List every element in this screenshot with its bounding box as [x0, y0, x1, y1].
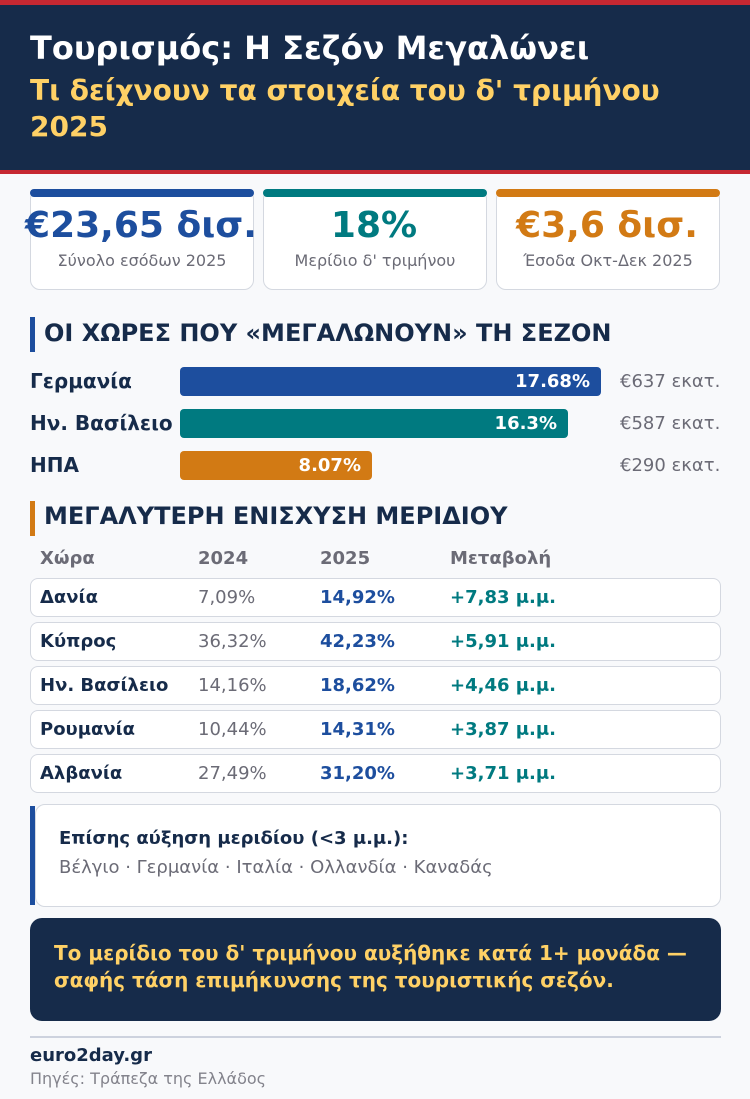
table row: Cyprus: +5,91 μ.μ. [450, 631, 556, 652]
header banner [0, 0, 750, 174]
bar row: Germany: €637 εκατ. [620, 371, 720, 392]
table row: Albania: +3,71 μ.μ. [450, 763, 556, 784]
bar row: USA: ΗΠΑ [30, 453, 79, 477]
table row: Denmark: Δανία [40, 587, 98, 608]
table header [40, 548, 551, 569]
table row: Cyprus: 36,32% [198, 631, 267, 652]
table header: Μεταβολή [450, 548, 551, 569]
bar chart [30, 367, 720, 480]
panel heading: Επίσης αύξηση μεριδίου (<3 μ.μ.): [59, 828, 408, 849]
table [30, 548, 721, 793]
table row: UK: 18,62% [320, 675, 395, 696]
panel: other countries [30, 804, 721, 907]
bar row: USA [30, 451, 720, 480]
stat card: Q4 revenue [496, 189, 720, 290]
bar row: Germany [30, 367, 720, 396]
stat card: Q4 share: 18% [331, 205, 417, 246]
table row: UK: 14,16% [198, 675, 267, 696]
stat card: total revenue [30, 189, 254, 290]
callout: σαφής τάση επιμήκυνσης της τουριστικής σεζόν. [54, 968, 614, 992]
table header: 2024 [198, 548, 248, 569]
table row: Albania: 27,49% [198, 763, 267, 784]
table row: UK [30, 666, 721, 705]
table row: Cyprus: 42,23% [320, 631, 395, 652]
table row: Albania [30, 754, 721, 793]
table row: Denmark [30, 578, 721, 617]
stat card: Q4 share [263, 189, 487, 290]
callout [30, 918, 721, 1021]
table row: Romania [30, 710, 721, 749]
table row: UK: +4,46 μ.μ. [450, 675, 556, 696]
table row: Albania: Αλβανία [40, 763, 122, 784]
stat card: Q4 revenue: €3,6 δισ. [516, 205, 698, 246]
table row: Denmark: 7,09% [198, 587, 255, 608]
stat card: Q4 revenue: Έσοδα Οκτ-Δεκ 2025 [523, 251, 693, 270]
heading: countries: ΟΙ ΧΩΡΕΣ ΠΟΥ «ΜΕΓΑΛΩΝΟΥΝ» ΤΗ ΣΕΖΟΝ [44, 319, 611, 347]
bar row: USA: 8.07% [299, 455, 361, 476]
title: Τουρισμός: Η Σεζόν Μεγαλώνει [30, 29, 589, 67]
table row: Albania: 31,20% [320, 763, 395, 784]
table row: UK: Ην. Βασίλειο [40, 675, 168, 696]
panel country list: Βέλγιο · Γερμανία · Ιταλία · Ολλανδία · Καναδάς [59, 857, 493, 878]
table row: Denmark: 14,92% [320, 587, 395, 608]
table row: Denmark: +7,83 μ.μ. [450, 587, 556, 608]
callout: Το μερίδιο του δ' τριμήνου αυξήθηκε κατά 1+ μονάδα — [54, 941, 687, 965]
table row: Romania: Ρουμανία [40, 719, 135, 740]
bar row: UK: Ην. Βασίλειο [30, 411, 173, 435]
stat card: total revenue: €23,65 δισ. [25, 205, 257, 246]
heading: biggest share gains: ΜΕΓΑΛΥΤΕΡΗ ΕΝΙΣΧΥΣΗ ΜΕΡΙΔΙΟΥ [44, 502, 508, 530]
table row: Cyprus [30, 622, 721, 661]
table row: Romania: 14,31% [320, 719, 395, 740]
bar row: Germany: 17.68% [515, 371, 590, 392]
footer sources: Πηγές: Τράπεζα της Ελλάδος [30, 1069, 266, 1088]
footer [30, 1036, 721, 1099]
subtitle: Τι δείχνουν τα στοιχεία του δ' τριμήνου 2025 [30, 74, 660, 142]
bar row: USA: €290 εκατ. [620, 455, 720, 476]
stat card: total revenue: Σύνολο εσόδων 2025 [58, 251, 226, 270]
bar row: UK: 16.3% [495, 413, 557, 434]
stat card: Q4 share: Μερίδιο δ' τριμήνου [295, 251, 455, 270]
bar row: UK [30, 409, 720, 438]
bar row: Germany: Γερμανία [30, 369, 132, 393]
table row: Romania: 10,44% [198, 719, 267, 740]
table row: Romania: +3,87 μ.μ. [450, 719, 556, 740]
footer brand: euro2day.gr [30, 1045, 152, 1066]
table header: 2025 [320, 548, 370, 569]
table row: Cyprus: Κύπρος [40, 631, 116, 652]
bar row: UK: €587 εκατ. [620, 413, 720, 434]
table header: Χώρα [40, 548, 95, 569]
